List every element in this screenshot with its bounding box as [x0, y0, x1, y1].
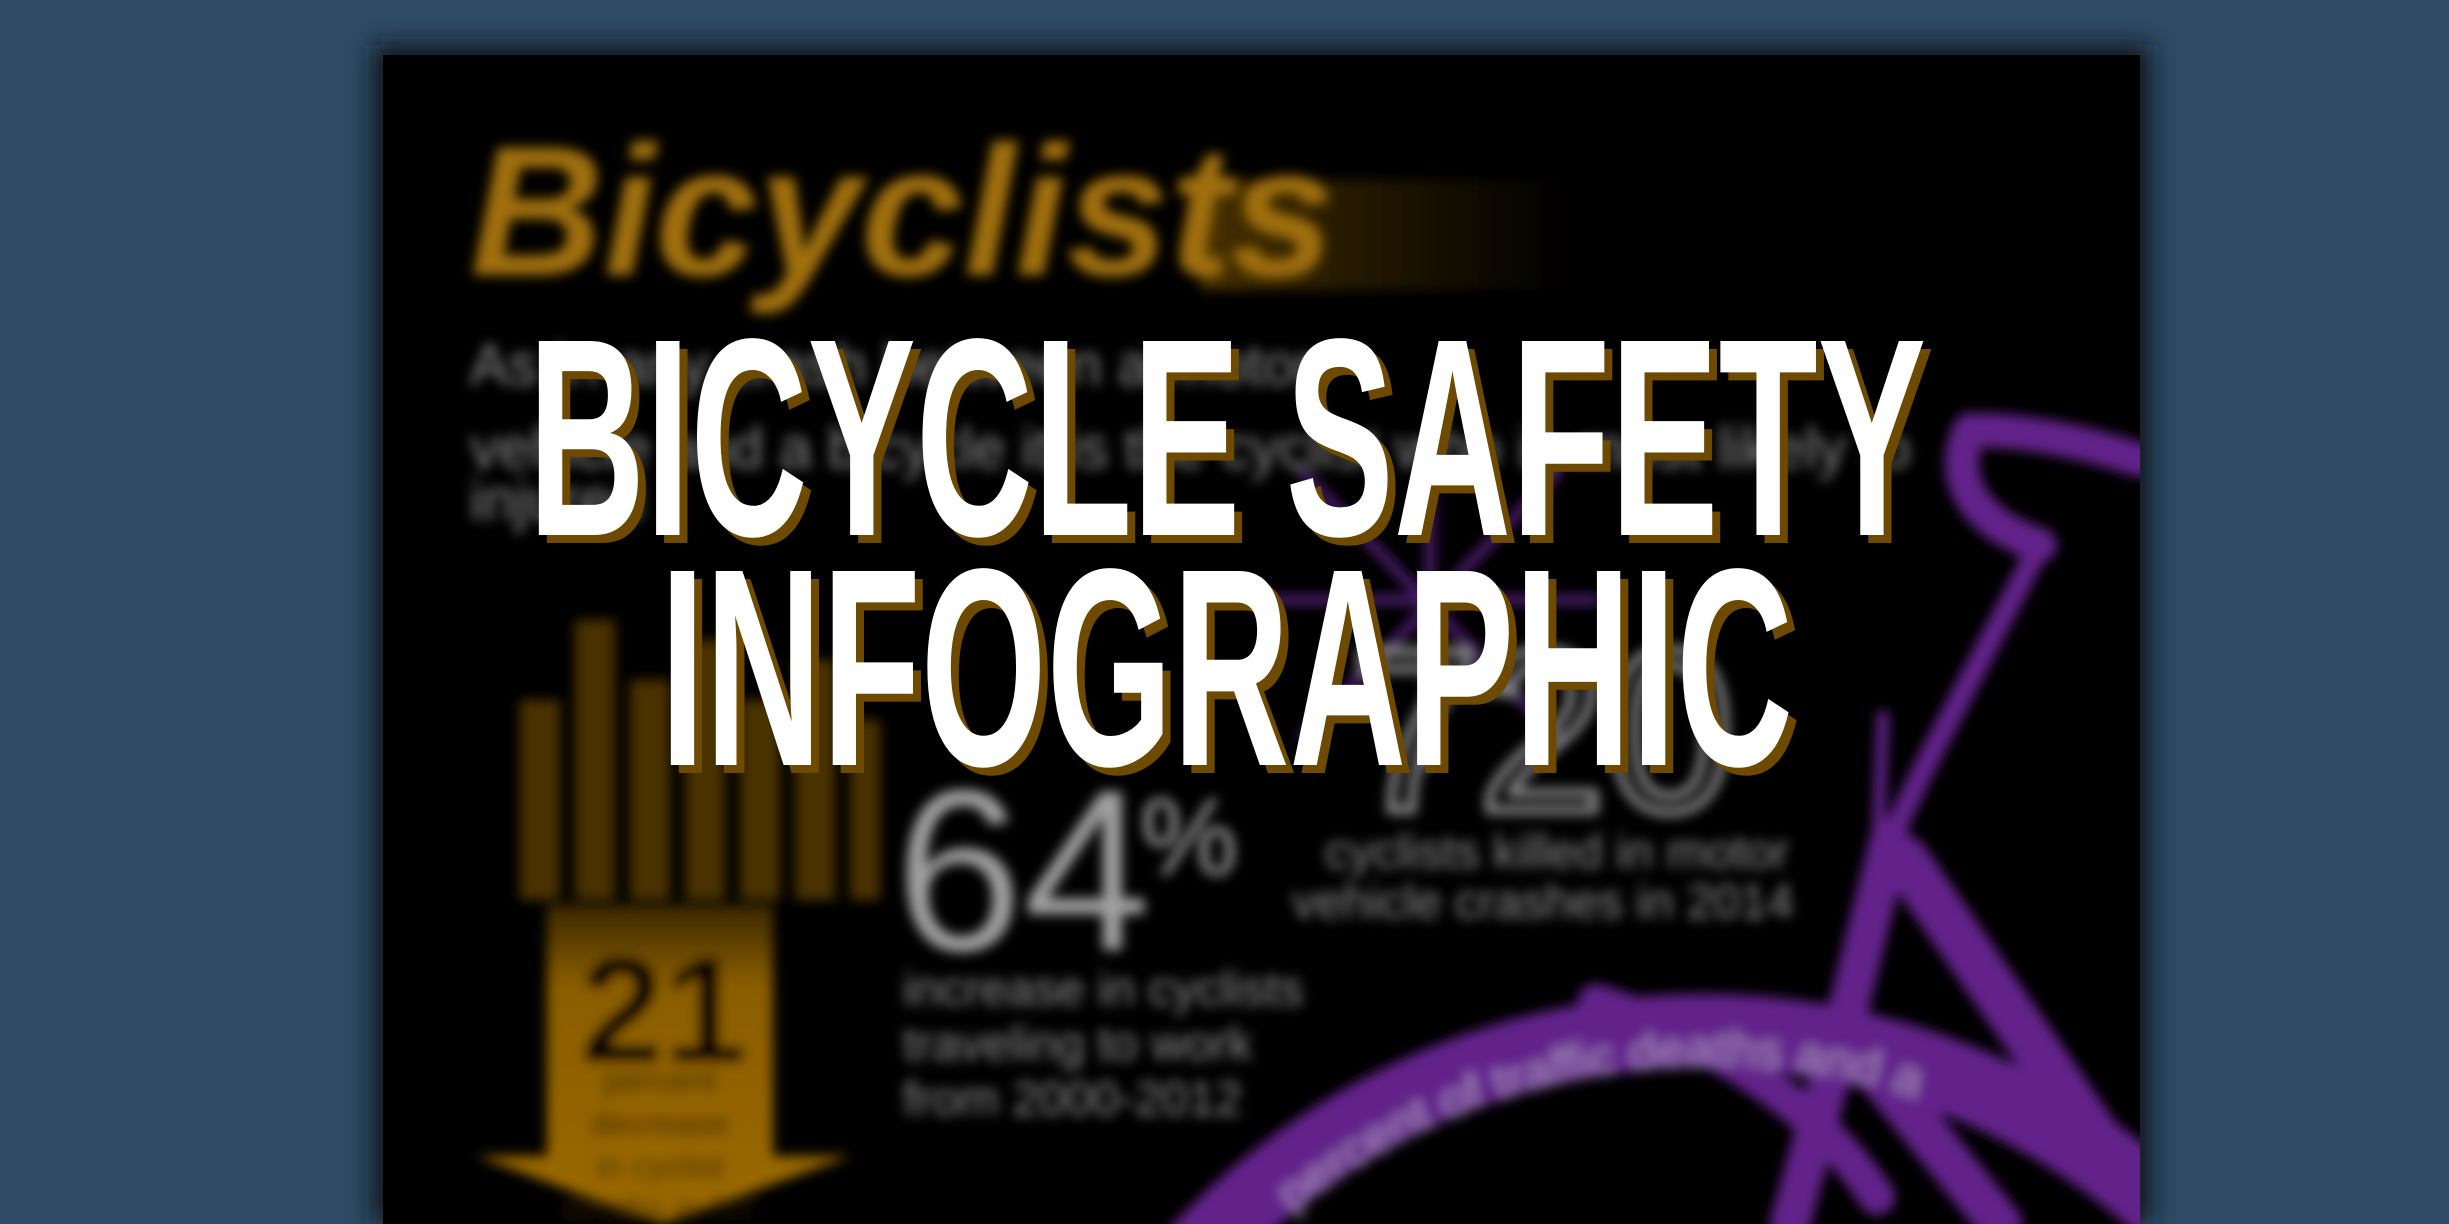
background panel shadow [373, 45, 2150, 1224]
caption 64%: from 2000-2012 [903, 1073, 1242, 1126]
caption 64%: traveling to work [903, 1018, 1253, 1071]
stat 720: 720 [1350, 602, 1734, 859]
caption 720: cyclists killed in motor [1325, 826, 1789, 879]
intro text: As in any crash between a motor [470, 333, 1315, 398]
title [528, 280, 1934, 833]
panel: blurred infographic: percent of traffic deaths and a [1274, 1024, 1927, 1224]
heading: Bicyclists: Bicyclists [470, 109, 1334, 315]
panel: blurred infographic [383, 55, 2140, 1224]
arrow: 21 percent: decrease [590, 1105, 730, 1143]
intro text: vehicle and a bicycle it is the cyclist who is most likely to [470, 416, 1911, 481]
intro text [470, 333, 1911, 533]
stat 64%: 64 [895, 742, 1151, 999]
arrow: 21 percent: percent [603, 1062, 717, 1100]
title shadow [536, 288, 1934, 833]
bike: purple [1162, 404, 2140, 1224]
caption 720 [1292, 826, 1794, 929]
stat 64%: % [1140, 776, 1238, 899]
arrow: 21 percent: 21 [580, 926, 747, 1094]
intro text: injured [470, 468, 644, 533]
starburst [1260, 440, 1600, 770]
caption 64%: increase in cyclists [903, 963, 1303, 1016]
chart: gold dotted bars [520, 620, 880, 900]
arrow: 21 percent [476, 905, 851, 1224]
arrow: 21 percent: in cyclist [596, 1148, 725, 1186]
caption 720: vehicle crashes in 2014 [1292, 876, 1794, 929]
caption 64% [903, 963, 1303, 1126]
title text [528, 280, 1926, 825]
